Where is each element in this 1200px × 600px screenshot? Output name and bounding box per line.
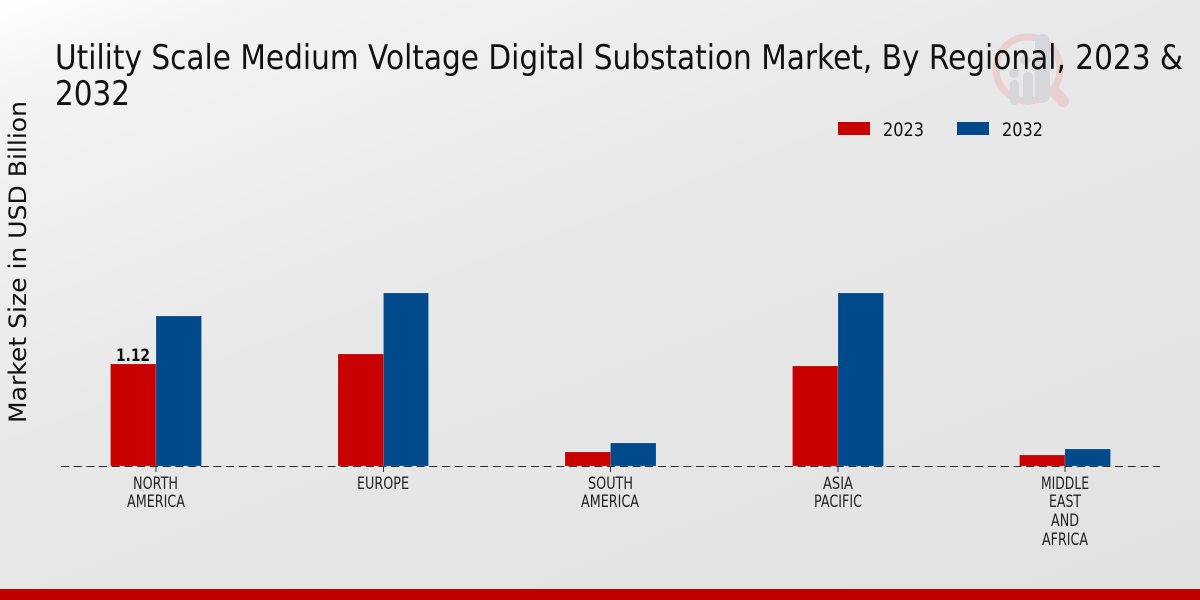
axis label: North America: NORTH bbox=[133, 474, 178, 494]
title: 2032 bbox=[55, 74, 130, 114]
bars: Asia Pacific bbox=[792, 293, 884, 466]
axis label: Middle East and Africa bbox=[1041, 474, 1089, 550]
axis label: South America bbox=[581, 474, 639, 512]
axis label: North America bbox=[127, 474, 185, 512]
axis label: Middle East and Africa: MIDDLE bbox=[1041, 474, 1089, 494]
legend bbox=[838, 119, 1043, 141]
bar chart bbox=[61, 293, 1160, 472]
bars: North America bbox=[110, 316, 202, 466]
bars: South America bbox=[565, 443, 656, 466]
footer bar bbox=[0, 589, 1200, 600]
axis label: Europe: EUROPE bbox=[357, 474, 409, 494]
axis label: North America: AMERICA bbox=[127, 492, 185, 512]
icon: watermark logo bbox=[996, 34, 1063, 105]
axis label: Asia Pacific: PACIFIC bbox=[814, 492, 862, 512]
bars: Middle East and Africa bbox=[1020, 449, 1110, 466]
legend item: 2023: 2023 bbox=[883, 119, 924, 141]
axis label: South America: SOUTH bbox=[588, 474, 633, 494]
legend item: 2023 bbox=[838, 119, 924, 141]
legend item: 2032: 2032 bbox=[1002, 119, 1043, 141]
title bbox=[55, 38, 1183, 114]
axis label: Middle East and Africa: AND bbox=[1051, 511, 1079, 531]
y-axis label: Market Size in USD Billion bbox=[4, 101, 32, 423]
bars: Europe bbox=[338, 293, 428, 466]
legend item: 2032 bbox=[957, 119, 1043, 141]
axis label: South America: AMERICA bbox=[581, 492, 639, 512]
axis label: Middle East and Africa: EAST bbox=[1049, 492, 1081, 512]
axis label: Middle East and Africa: AFRICA bbox=[1042, 530, 1088, 550]
axis label: Asia Pacific: ASIA bbox=[823, 474, 853, 494]
axis label: Asia Pacific bbox=[814, 474, 862, 512]
data label: 1.12: 1.12 bbox=[116, 346, 150, 366]
